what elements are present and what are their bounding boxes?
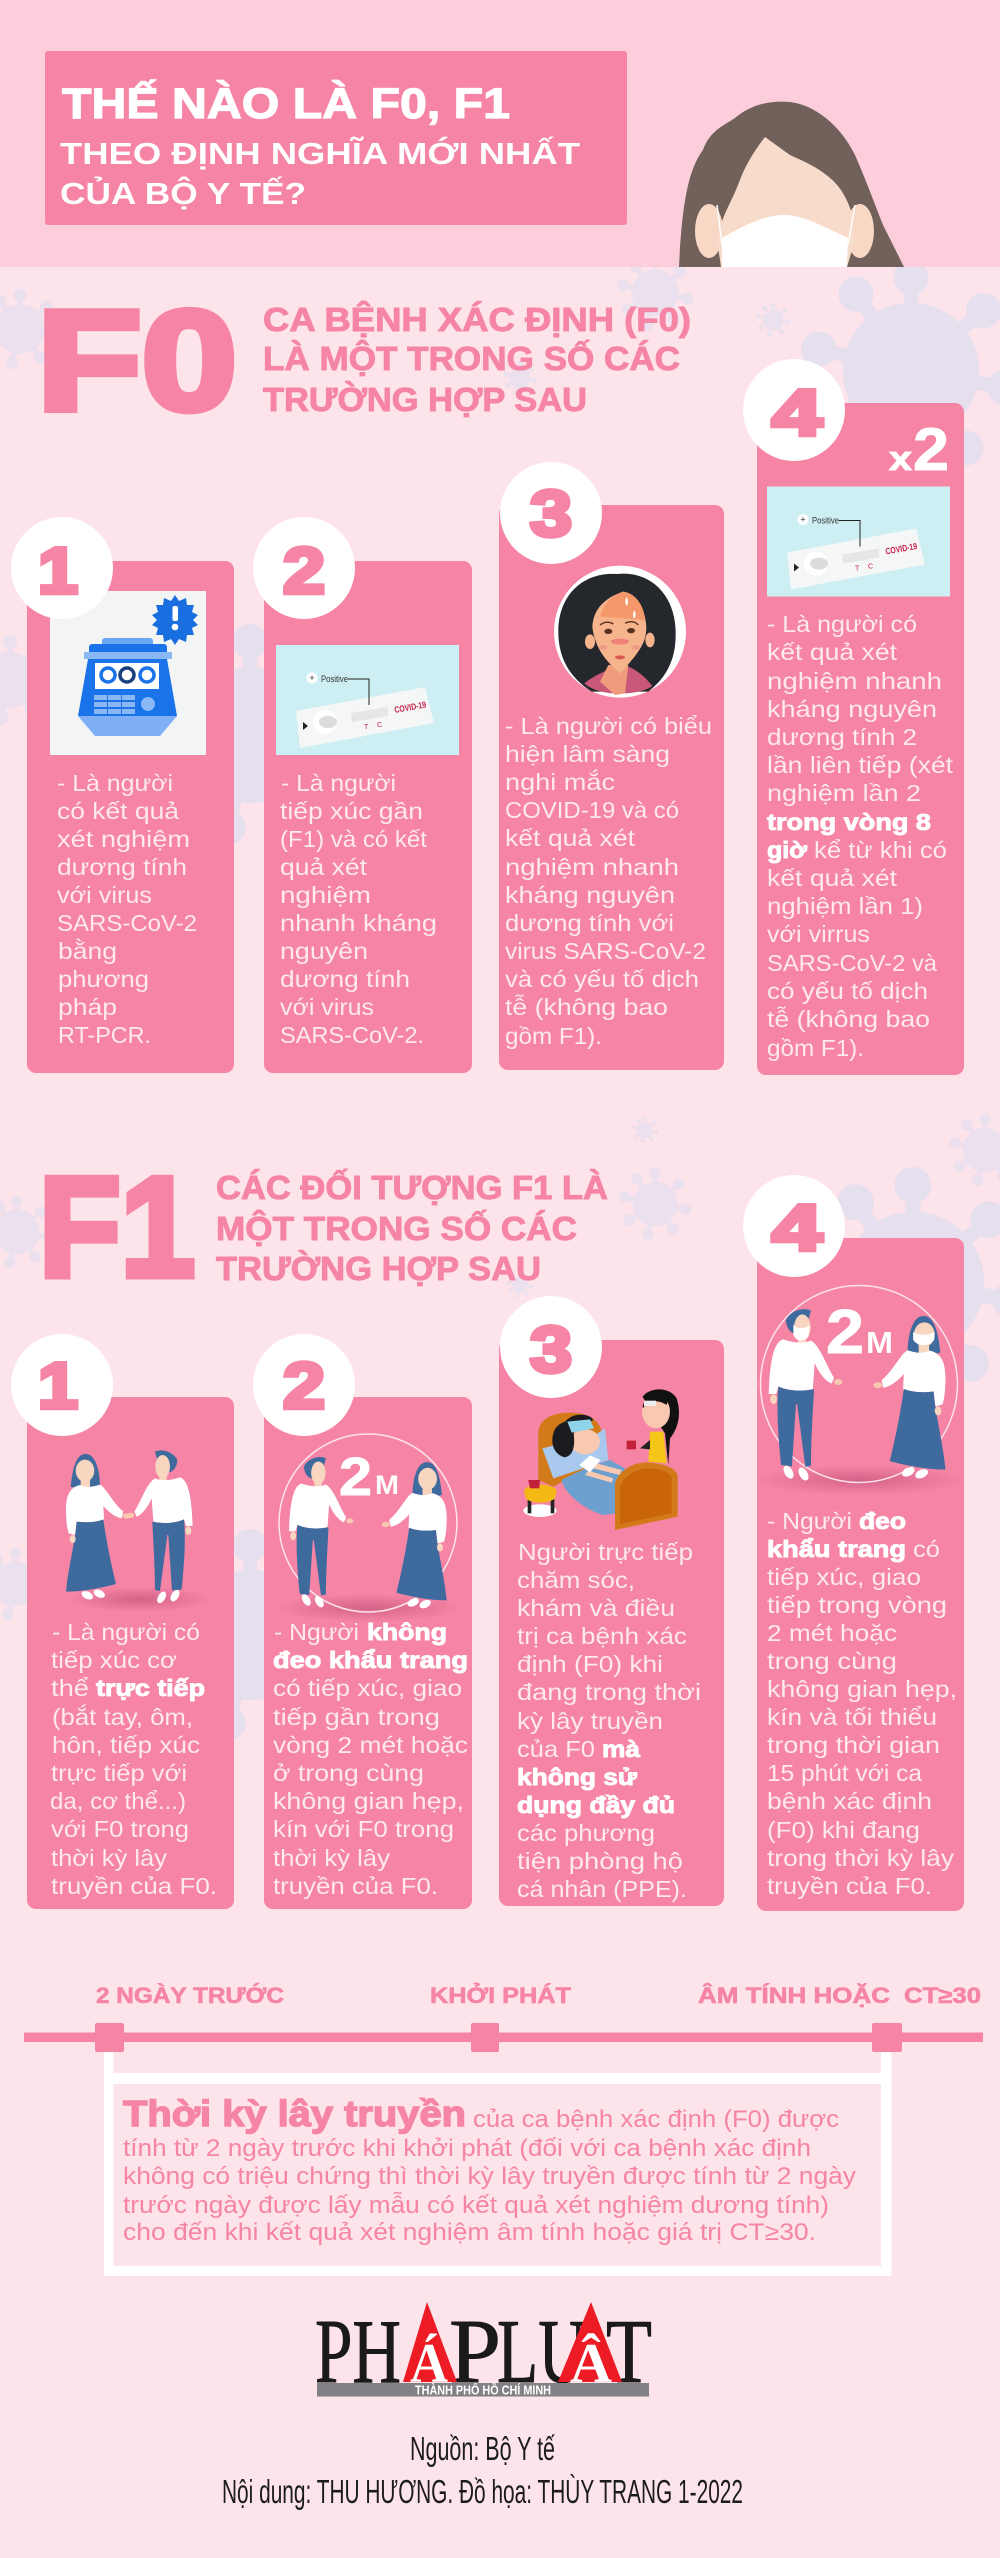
text: case 4: truyền của F0. (767, 1873, 932, 1899)
text: case 2: có tiếp xúc, giao (273, 1675, 462, 1701)
text: case 2: tiếp xúc gần (280, 798, 423, 824)
text: case 2: tiếp gần trong (273, 1704, 440, 1730)
text: case 4: - Người (767, 1508, 852, 1534)
logo: Pháp Luật: P (449, 2301, 501, 2402)
text: case 4: 2 mét hoặc (767, 1620, 897, 1646)
number 2 circle (253, 517, 355, 619)
title box: CỦA BỘ Y TẾ? (60, 175, 306, 211)
panel: F1 case 2 (253, 1334, 472, 1909)
logo: Pháp Luật: Ậ (570, 2332, 613, 2395)
icon: two people within 2 metres: 2 (339, 1447, 372, 1507)
text: case 4: nghiệm lần 1) (767, 893, 923, 919)
F0 subheading: LÀ MỘT TRONG SỐ CÁC (263, 339, 680, 377)
number 2 circle (253, 1334, 355, 1436)
text: case 1: dương tính (57, 854, 187, 880)
number 3 circle (500, 462, 602, 564)
text: contagious period definition (123, 2093, 856, 2246)
icon: carer and patient in bed (523, 1389, 679, 1530)
text: case 3: trị ca bệnh xác (517, 1623, 687, 1649)
text: case 4: gồm F1). (767, 1035, 864, 1061)
text: case 4: với virrus (767, 921, 870, 947)
text: case 4: lần liên tiếp (xét (767, 752, 954, 778)
panel: F0 case 4 (743, 359, 964, 1075)
text: case 4: khẩu trang (767, 1536, 906, 1562)
F1 subheading: CÁC ĐỐI TƯỢNG F1 LÀ (216, 1168, 608, 1206)
text: case 2: kín với F0 trong (273, 1816, 454, 1842)
number 1 circle: 1 (38, 534, 78, 607)
text: case 4: kín và tối thiểu (767, 1704, 937, 1730)
image: rapid antigen test (276, 645, 459, 755)
text: case 2: nghiệm (280, 882, 371, 908)
text: case 3: COVID-19 và có (505, 797, 679, 823)
text: case 1: - Là người có (52, 1619, 200, 1645)
text: case 4: dương tính 2 (767, 724, 917, 750)
text: case 2: SARS-CoV-2. (280, 1022, 424, 1048)
text: case 1: với virus (57, 882, 152, 908)
panel: F0 case 2 (253, 517, 472, 1073)
number 4 circle: 4 (772, 376, 822, 449)
text: case 2: nhanh kháng (280, 910, 437, 936)
logo: Pháp Luật: T (606, 2301, 652, 2402)
image: rapid antigen test: COVID-19 (394, 700, 427, 715)
icon: two masked people within 2 metres: 2 (826, 1298, 864, 1367)
text: case 4: tiếp trong vòng (767, 1592, 947, 1618)
text: case 4: nghiệm lần 2 (767, 780, 921, 806)
text: case 2: truyền của F0. (273, 1873, 438, 1899)
text: case 1: phương (58, 966, 149, 992)
number 3 circle (500, 1296, 602, 1398)
text: case 2: thời kỳ lây (273, 1845, 391, 1871)
text: case 4: (F0) khi đang (767, 1817, 920, 1843)
F0 big heading: F0 (37, 282, 237, 440)
text: case 4: - Là người có (767, 611, 917, 637)
text: case 1: có kết quả (57, 798, 179, 824)
text: case 4: kể từ khi có (814, 837, 947, 863)
image: rapid antigen test: + (800, 514, 806, 524)
F0 subheading: CA BỆNH XÁC ĐỊNH (F0) (263, 301, 691, 338)
text: case 2: quả xét (280, 854, 368, 880)
text: case 4: đeo (859, 1508, 906, 1534)
label: x2: x (889, 440, 912, 478)
title box: THẾ NÀO LÀ F0, F1 (62, 80, 510, 128)
F1 big heading: F1 (39, 1148, 195, 1307)
text: case 2: không (367, 1619, 447, 1645)
icon: two masked people within 2 metres: M (866, 1325, 893, 1360)
text: case 3: gồm F1). (505, 1023, 602, 1049)
logo: Pháp Luật (315, 2301, 652, 2402)
text: contagious period definition: Thời kỳ lây truyền (123, 2093, 466, 2134)
text: case 2: - Người (274, 1619, 359, 1645)
logo: Pháp Luật: PH (315, 2301, 401, 2402)
icon: two people within 2 metres: M (375, 1470, 399, 1500)
text: case 4: kết quả xét (767, 639, 898, 665)
image: rapid antigen test: COVID-19 (885, 541, 918, 556)
text: case 2: không gian hẹp, (273, 1788, 464, 1814)
credits (222, 2430, 743, 2510)
title box (45, 51, 627, 225)
text: case 3: dụng đầy đủ (517, 1792, 675, 1818)
text: case 3: kết quả xét (505, 825, 636, 851)
number 3 circle: 3 (530, 1313, 572, 1386)
timeline labels (96, 1983, 981, 2008)
F1 subheading: MỘT TRONG SỐ CÁC (216, 1209, 577, 1247)
F1 subheading: TRƯỜNG HỢP SAU (216, 1250, 541, 1287)
text: case 4 (767, 611, 954, 1061)
text: case 1: SARS-CoV-2 (57, 910, 197, 936)
text: case 2 (280, 770, 437, 1048)
F0 subheading: TRƯỜNG HỢP SAU (263, 381, 587, 418)
text: case 1: tiếp xúc cơ (51, 1647, 177, 1673)
text: case 3 (517, 1539, 701, 1902)
image: rapid antigen test: T (855, 566, 860, 572)
text: contagious period definition: trước ngày được lấy mẫu có kết quả xét nghiệm dương tính) (123, 2192, 829, 2219)
logo: Pháp Luật: THÀNH PHỐ HỒ CHÍ MINH (415, 2382, 551, 2398)
image: rapid antigen test: + (309, 673, 315, 683)
number 1 circle: 1 (38, 1349, 78, 1422)
text: case 4: có (913, 1536, 940, 1562)
text: contagious period definition: tính từ 2 ngày trước khi khởi phát (đối với ca bệnh xác định (123, 2135, 811, 2162)
text: case 3: nghi mắc (505, 769, 615, 795)
icon: two people within 2 metres (273, 1434, 463, 1622)
text: case 1: trực tiếp với (51, 1760, 187, 1786)
image: PCR machine (50, 591, 206, 755)
text: case 2: vòng 2 mét hoặc (273, 1732, 468, 1758)
number 1 circle (11, 517, 113, 619)
text: case 4: trong thời gian (767, 1732, 940, 1758)
text: case 1: bằng (58, 938, 117, 964)
timeline bar (24, 2023, 983, 2052)
F1 subheading (216, 1168, 608, 1287)
panel: F1 case 4 (743, 1175, 964, 1911)
text: contagious period definition: không có triệu chứng thì thời kỳ lây truyền được tính từ 2 ngày (123, 2163, 856, 2190)
text: case 2: - Là người (281, 770, 396, 796)
text: case 3: của F0 (517, 1736, 595, 1762)
text: case 1: thể (51, 1675, 89, 1701)
number 3 circle: 3 (530, 477, 572, 550)
number 2 circle: 2 (283, 1349, 325, 1422)
text: case 3: mà (602, 1736, 640, 1762)
number 2 circle: 2 (283, 534, 325, 607)
text: case 3: các phương (517, 1820, 655, 1846)
text: case 3: khám và điều (517, 1595, 675, 1621)
timeline labels: 2 NGÀY TRƯỚC (96, 1983, 284, 2008)
text: case 3: chăm sóc, (517, 1567, 635, 1593)
image: rapid antigen test: C (868, 564, 873, 570)
title box: THEO ĐỊNH NGHĨA MỚI NHẤT (60, 135, 580, 171)
text: case 4: trong cùng (767, 1648, 897, 1674)
text: case 4: tiếp xúc, giao (767, 1564, 921, 1590)
text: case 2: đeo khẩu trang (273, 1647, 468, 1673)
label: x2: 2 (913, 416, 949, 483)
number 4 circle (743, 1175, 845, 1277)
text: case 1: RT-PCR. (58, 1022, 151, 1048)
timeline labels: KHỞI PHÁT (430, 1983, 572, 2008)
text: case 1: - Là người (57, 770, 173, 796)
text: case 4: giờ (767, 837, 808, 863)
text: case 4: có yếu tố dịch (767, 978, 928, 1004)
text: case 1: xét nghiệm (57, 826, 190, 852)
contagious period frame (104, 2052, 892, 2276)
timeline labels: ÂM TÍNH HOẶC (698, 1983, 890, 2008)
label: x2 (889, 416, 949, 483)
header band (0, 0, 1000, 267)
text: case 2: với virus (280, 994, 374, 1020)
text: case 3: định (F0) khi (517, 1651, 663, 1677)
text: case 1 (57, 770, 197, 1048)
text: case 4: tễ (không bao (767, 1006, 930, 1032)
text: case 2: dương tính (280, 966, 410, 992)
text: case 3: tiện phòng hộ (517, 1848, 683, 1874)
icon: woman wearing mask (679, 102, 904, 267)
text: case 2 (273, 1619, 468, 1899)
text: case 4: nghiệm nhanh (767, 668, 942, 694)
number 4 circle (743, 359, 845, 461)
logo: Pháp Luật: LU (497, 2301, 587, 2402)
background viruses (0, 255, 1000, 1740)
text: case 3: và có yếu tố dịch (505, 966, 699, 992)
text: case 3: đang trong thời (517, 1679, 701, 1705)
panel: F0 case 3 (499, 462, 724, 1070)
credits: Nguồn: Bộ Y tế (410, 2430, 555, 2467)
text: case 3: - Là người có biểu (505, 713, 712, 739)
icon: two people shaking hands (66, 1450, 212, 1612)
image: rapid antigen test: Positive (321, 674, 348, 684)
number 1 circle (11, 1334, 113, 1436)
image: rapid antigen test: C (377, 722, 382, 729)
text: case 3: dương tính với (505, 910, 674, 936)
text: case 4: SARS-CoV-2 và (767, 950, 937, 976)
text: case 3: không sử (517, 1764, 637, 1790)
text: case 3: kỳ lây truyền (517, 1708, 663, 1734)
F0 subheading (263, 301, 691, 418)
text: case 1: với F0 trong (51, 1816, 189, 1842)
text: case 1: (bắt tay, ôm, (52, 1704, 193, 1730)
text: case 1: pháp (58, 994, 117, 1020)
logo: Pháp Luật: Á (410, 2333, 449, 2395)
text: case 4 (767, 1508, 957, 1899)
text: contagious period definition: của ca bệnh xác định (F0) được (473, 2106, 839, 2133)
text: case 4: trong vòng 8 (767, 809, 931, 835)
image: rapid antigen test: T (364, 724, 369, 731)
text: case 1: truyền của F0. (51, 1873, 217, 1899)
text: case 4: bệnh xác định (767, 1788, 932, 1814)
panel: F1 case 3 (499, 1296, 724, 1906)
text: case 3: virus SARS-CoV-2 (505, 938, 706, 964)
text: case 2: nguyên (280, 938, 368, 964)
timeline labels: CT≥30 (904, 1983, 981, 2008)
text: case 1: thời kỳ lây (51, 1845, 168, 1871)
text: case 3: kháng nguyên (505, 882, 675, 908)
image: rapid antigen test (767, 486, 950, 596)
text: case 4: không gian hẹp, (767, 1676, 957, 1702)
text: case 4: kết quả xét (767, 865, 898, 891)
text: case 3: nghiệm nhanh (505, 854, 679, 880)
text: case 1: trực tiếp (96, 1675, 205, 1701)
text: case 1: hôn, tiếp xúc (52, 1732, 200, 1758)
text: case 1: da, cơ thể...) (50, 1788, 186, 1814)
panel: F1 case 1 (11, 1334, 234, 1909)
text: case 4: kháng nguyên (767, 696, 937, 722)
number 4 circle: 4 (772, 1191, 822, 1264)
text: case 4: 15 phút với ca (767, 1760, 922, 1786)
text: case 4: trong thời kỳ lây (767, 1845, 955, 1871)
text: case 3: hiện lâm sàng (505, 741, 670, 767)
icon: sick woman (554, 566, 686, 698)
text: case 3: tễ (không bao (505, 994, 668, 1020)
icon: two masked people within 2 metres (754, 1286, 964, 1495)
text: case 2: (F1) và có kết (280, 826, 428, 852)
text: case 2: ở trong cùng (273, 1760, 424, 1786)
panel: F0 case 1 (11, 517, 234, 1073)
text: case 3 (505, 713, 712, 1049)
image: rapid antigen test: Positive (812, 516, 839, 526)
text: case 1 (50, 1619, 217, 1899)
text: contagious period definition: cho đến khi kết quả xét nghiệm âm tính hoặc giá trị CT≥30. (123, 2219, 816, 2246)
text: case 3: Người trực tiếp (518, 1539, 693, 1565)
text: case 3: cá nhân (PPE). (517, 1876, 687, 1902)
